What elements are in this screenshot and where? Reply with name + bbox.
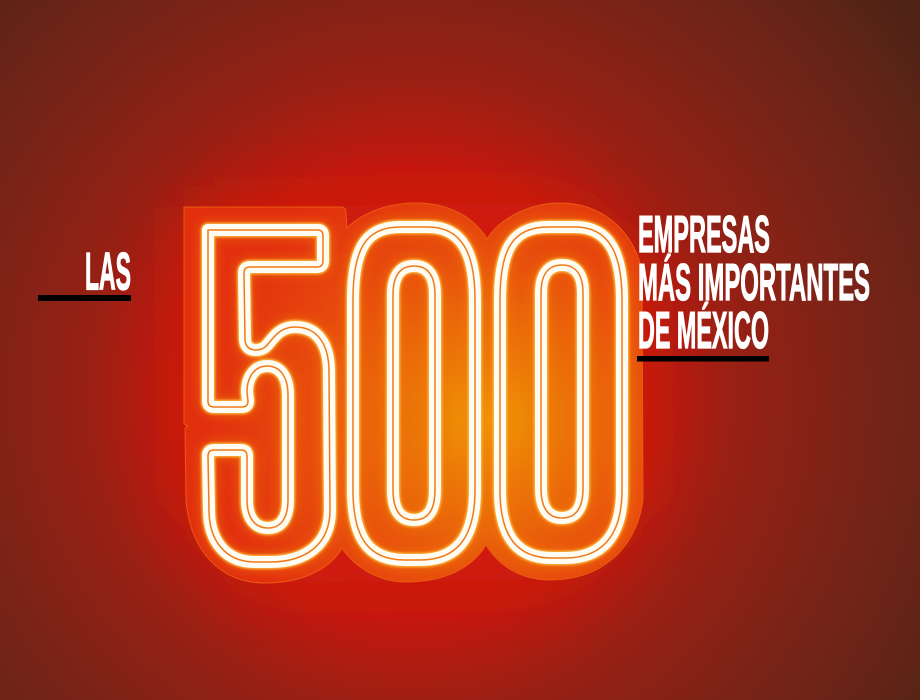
- digit 5 tube: [208, 230, 330, 562]
- heading: empresas más importantes de México: [637, 206, 870, 362]
- red glow: [184, 203, 643, 583]
- first digit 0 tube: [353, 227, 475, 560]
- tube glow: [208, 227, 622, 562]
- neon sign 500: [184, 203, 643, 583]
- heading: LAS: [38, 242, 131, 302]
- sign backboard: [184, 203, 643, 583]
- second digit 0 tube: [500, 227, 622, 558]
- text: LAS: [85, 242, 131, 302]
